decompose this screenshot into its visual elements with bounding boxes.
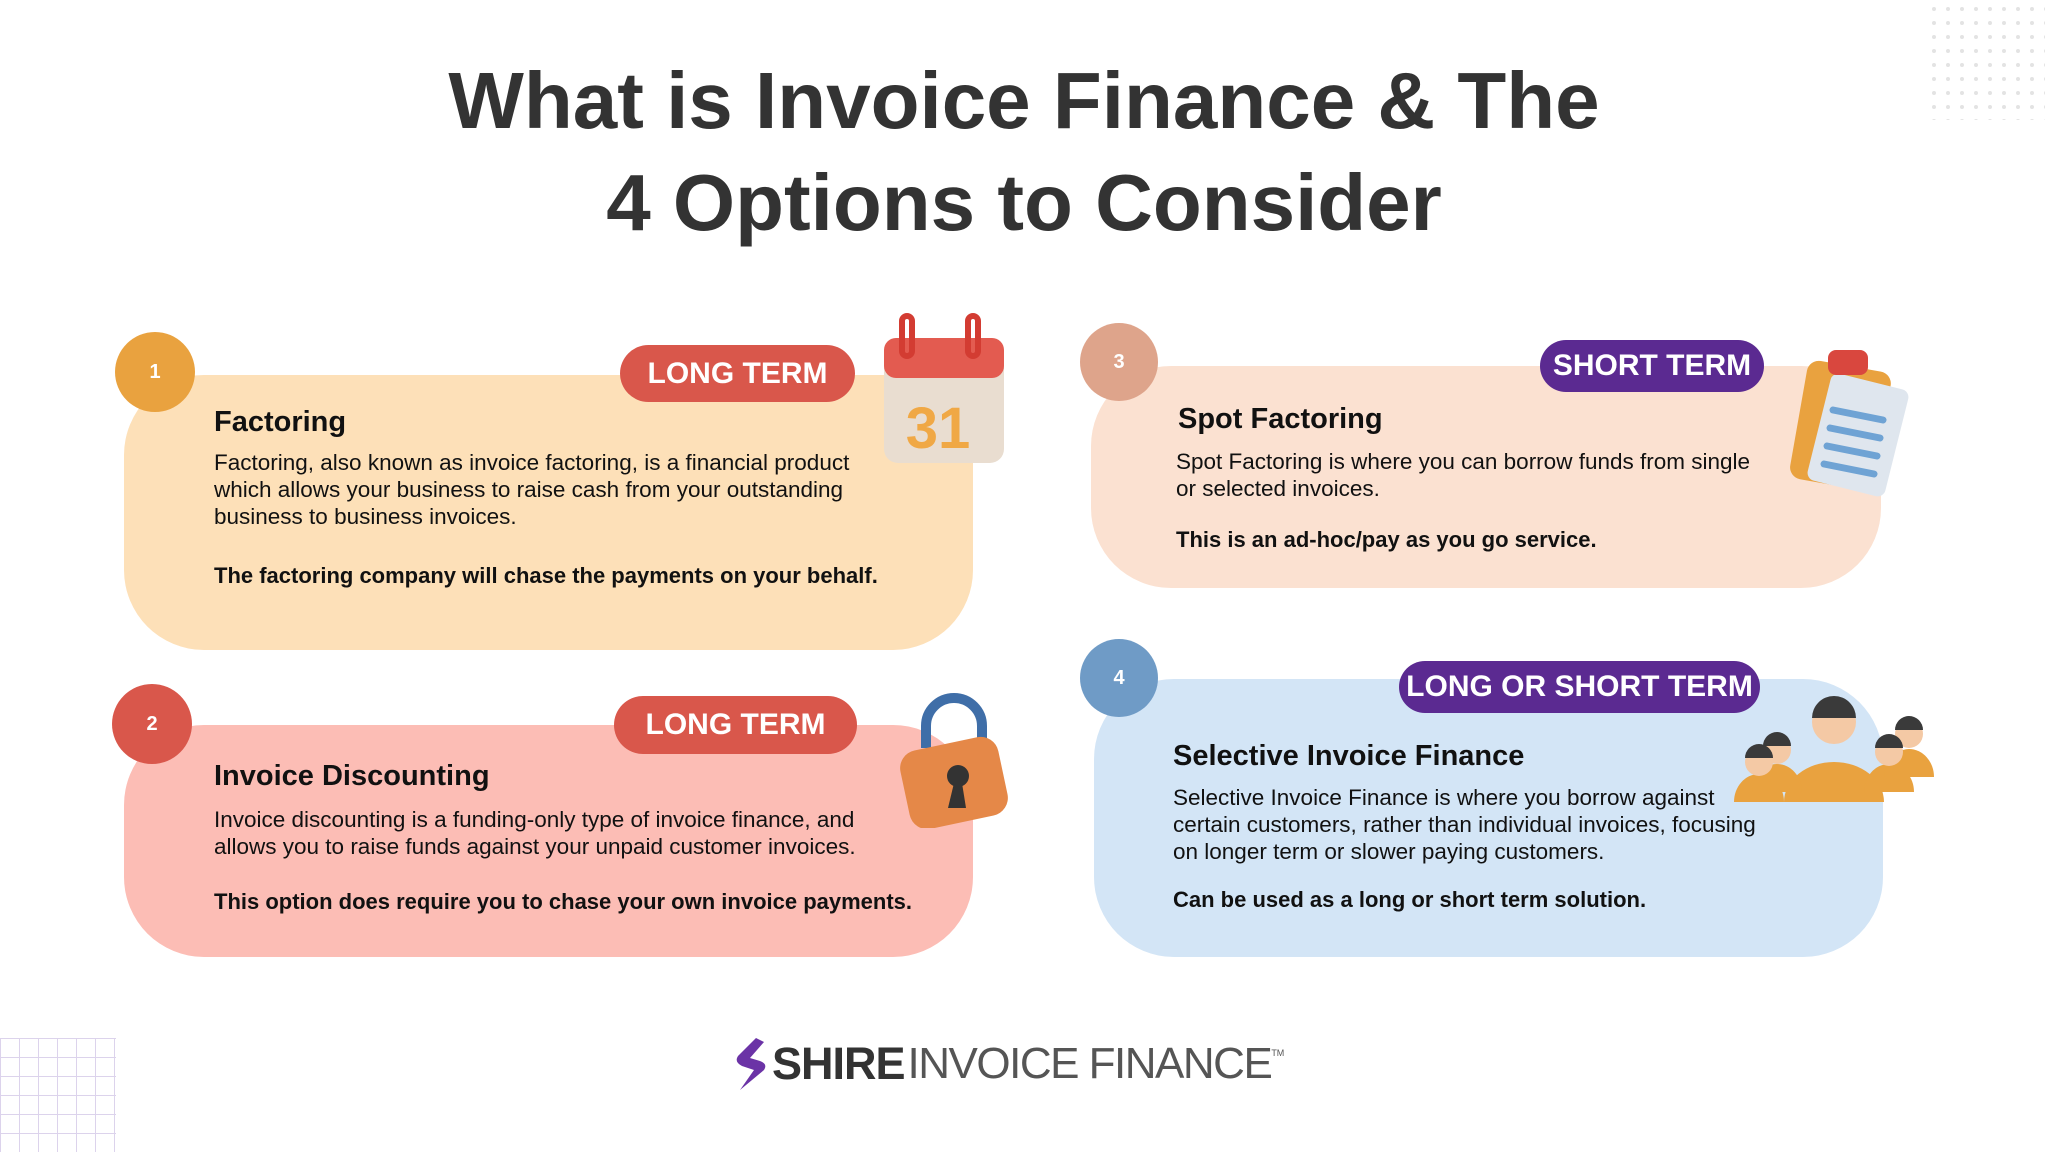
circle 3	[1080, 323, 1158, 401]
icon: calendar: 31	[906, 396, 970, 461]
body text: certain customers, rather than individual invoices, focusing	[1173, 812, 1756, 837]
icon: logo mark	[736, 1038, 766, 1090]
body text	[1173, 785, 1756, 864]
panel: spot factoring	[1080, 323, 1908, 588]
body text: which allows your business to raise cash from your outstanding	[214, 477, 843, 502]
logo: TM	[1271, 1048, 1284, 1058]
badge long term: LONG TERM	[648, 356, 828, 390]
body text: Factoring, also known as invoice factoring, is a financial product	[214, 450, 849, 475]
badge long term: LONG TERM	[646, 708, 826, 741]
body text: business to business invoices.	[214, 504, 517, 529]
body text: Selective Invoice Finance is where you borrow against	[1173, 785, 1715, 810]
panel: selective invoice finance	[1080, 639, 1934, 957]
badge long or short term: LONG OR SHORT TERM	[1406, 670, 1753, 703]
decorative dot grid	[1932, 7, 2045, 120]
title: 4 Options to Consider	[606, 158, 1442, 247]
decorative line grid	[0, 1038, 116, 1152]
body text	[1176, 449, 1750, 501]
bold note: Can be used as a long or short term solution.	[1173, 887, 1646, 912]
body text: on longer term or slower paying customers.	[1173, 839, 1604, 864]
panel: factoring	[115, 313, 1004, 650]
circle 1	[115, 332, 195, 412]
badge short term	[1540, 340, 1764, 392]
body text: or selected invoices.	[1176, 476, 1380, 501]
title	[448, 56, 1600, 247]
badge long term	[620, 345, 855, 402]
heading: Spot Factoring	[1178, 403, 1383, 435]
heading: Factoring	[214, 406, 346, 438]
panel: invoice discounting	[112, 684, 1008, 957]
icon: padlock	[900, 693, 1008, 828]
logo: INVOICE FINANCE	[908, 1039, 1271, 1088]
circle 1: 1	[149, 360, 161, 382]
icon: clipboard	[1790, 350, 1908, 496]
badge long or short term	[1399, 661, 1760, 713]
body text: Spot Factoring is where you can borrow funds from single	[1176, 449, 1750, 474]
body text: Invoice discounting is a funding-only type of invoice finance, and	[214, 807, 854, 832]
bold note: This is an ad-hoc/pay as you go service.	[1176, 527, 1597, 552]
icon: people	[1734, 696, 1934, 802]
logo: SHIRE	[772, 1038, 905, 1089]
circle 2	[112, 684, 192, 764]
circle 4	[1080, 639, 1158, 717]
logo	[736, 1038, 1284, 1090]
title: What is Invoice Finance & The	[448, 56, 1600, 145]
circle 3: 3	[1113, 350, 1125, 372]
circle 2: 2	[146, 712, 158, 734]
icon: calendar	[884, 313, 1004, 463]
body text: allows you to raise funds against your unpaid customer invoices.	[214, 834, 856, 859]
circle 4: 4	[1113, 666, 1125, 688]
bold note: This option does require you to chase your own invoice payments.	[214, 889, 912, 914]
body text	[214, 807, 856, 859]
heading: Selective Invoice Finance	[1173, 740, 1524, 772]
badge long term	[614, 696, 857, 754]
heading: Invoice Discounting	[214, 760, 490, 792]
badge short term: SHORT TERM	[1553, 349, 1751, 382]
body text	[214, 450, 850, 529]
bold note: The factoring company will chase the payments on your behalf.	[214, 563, 878, 588]
